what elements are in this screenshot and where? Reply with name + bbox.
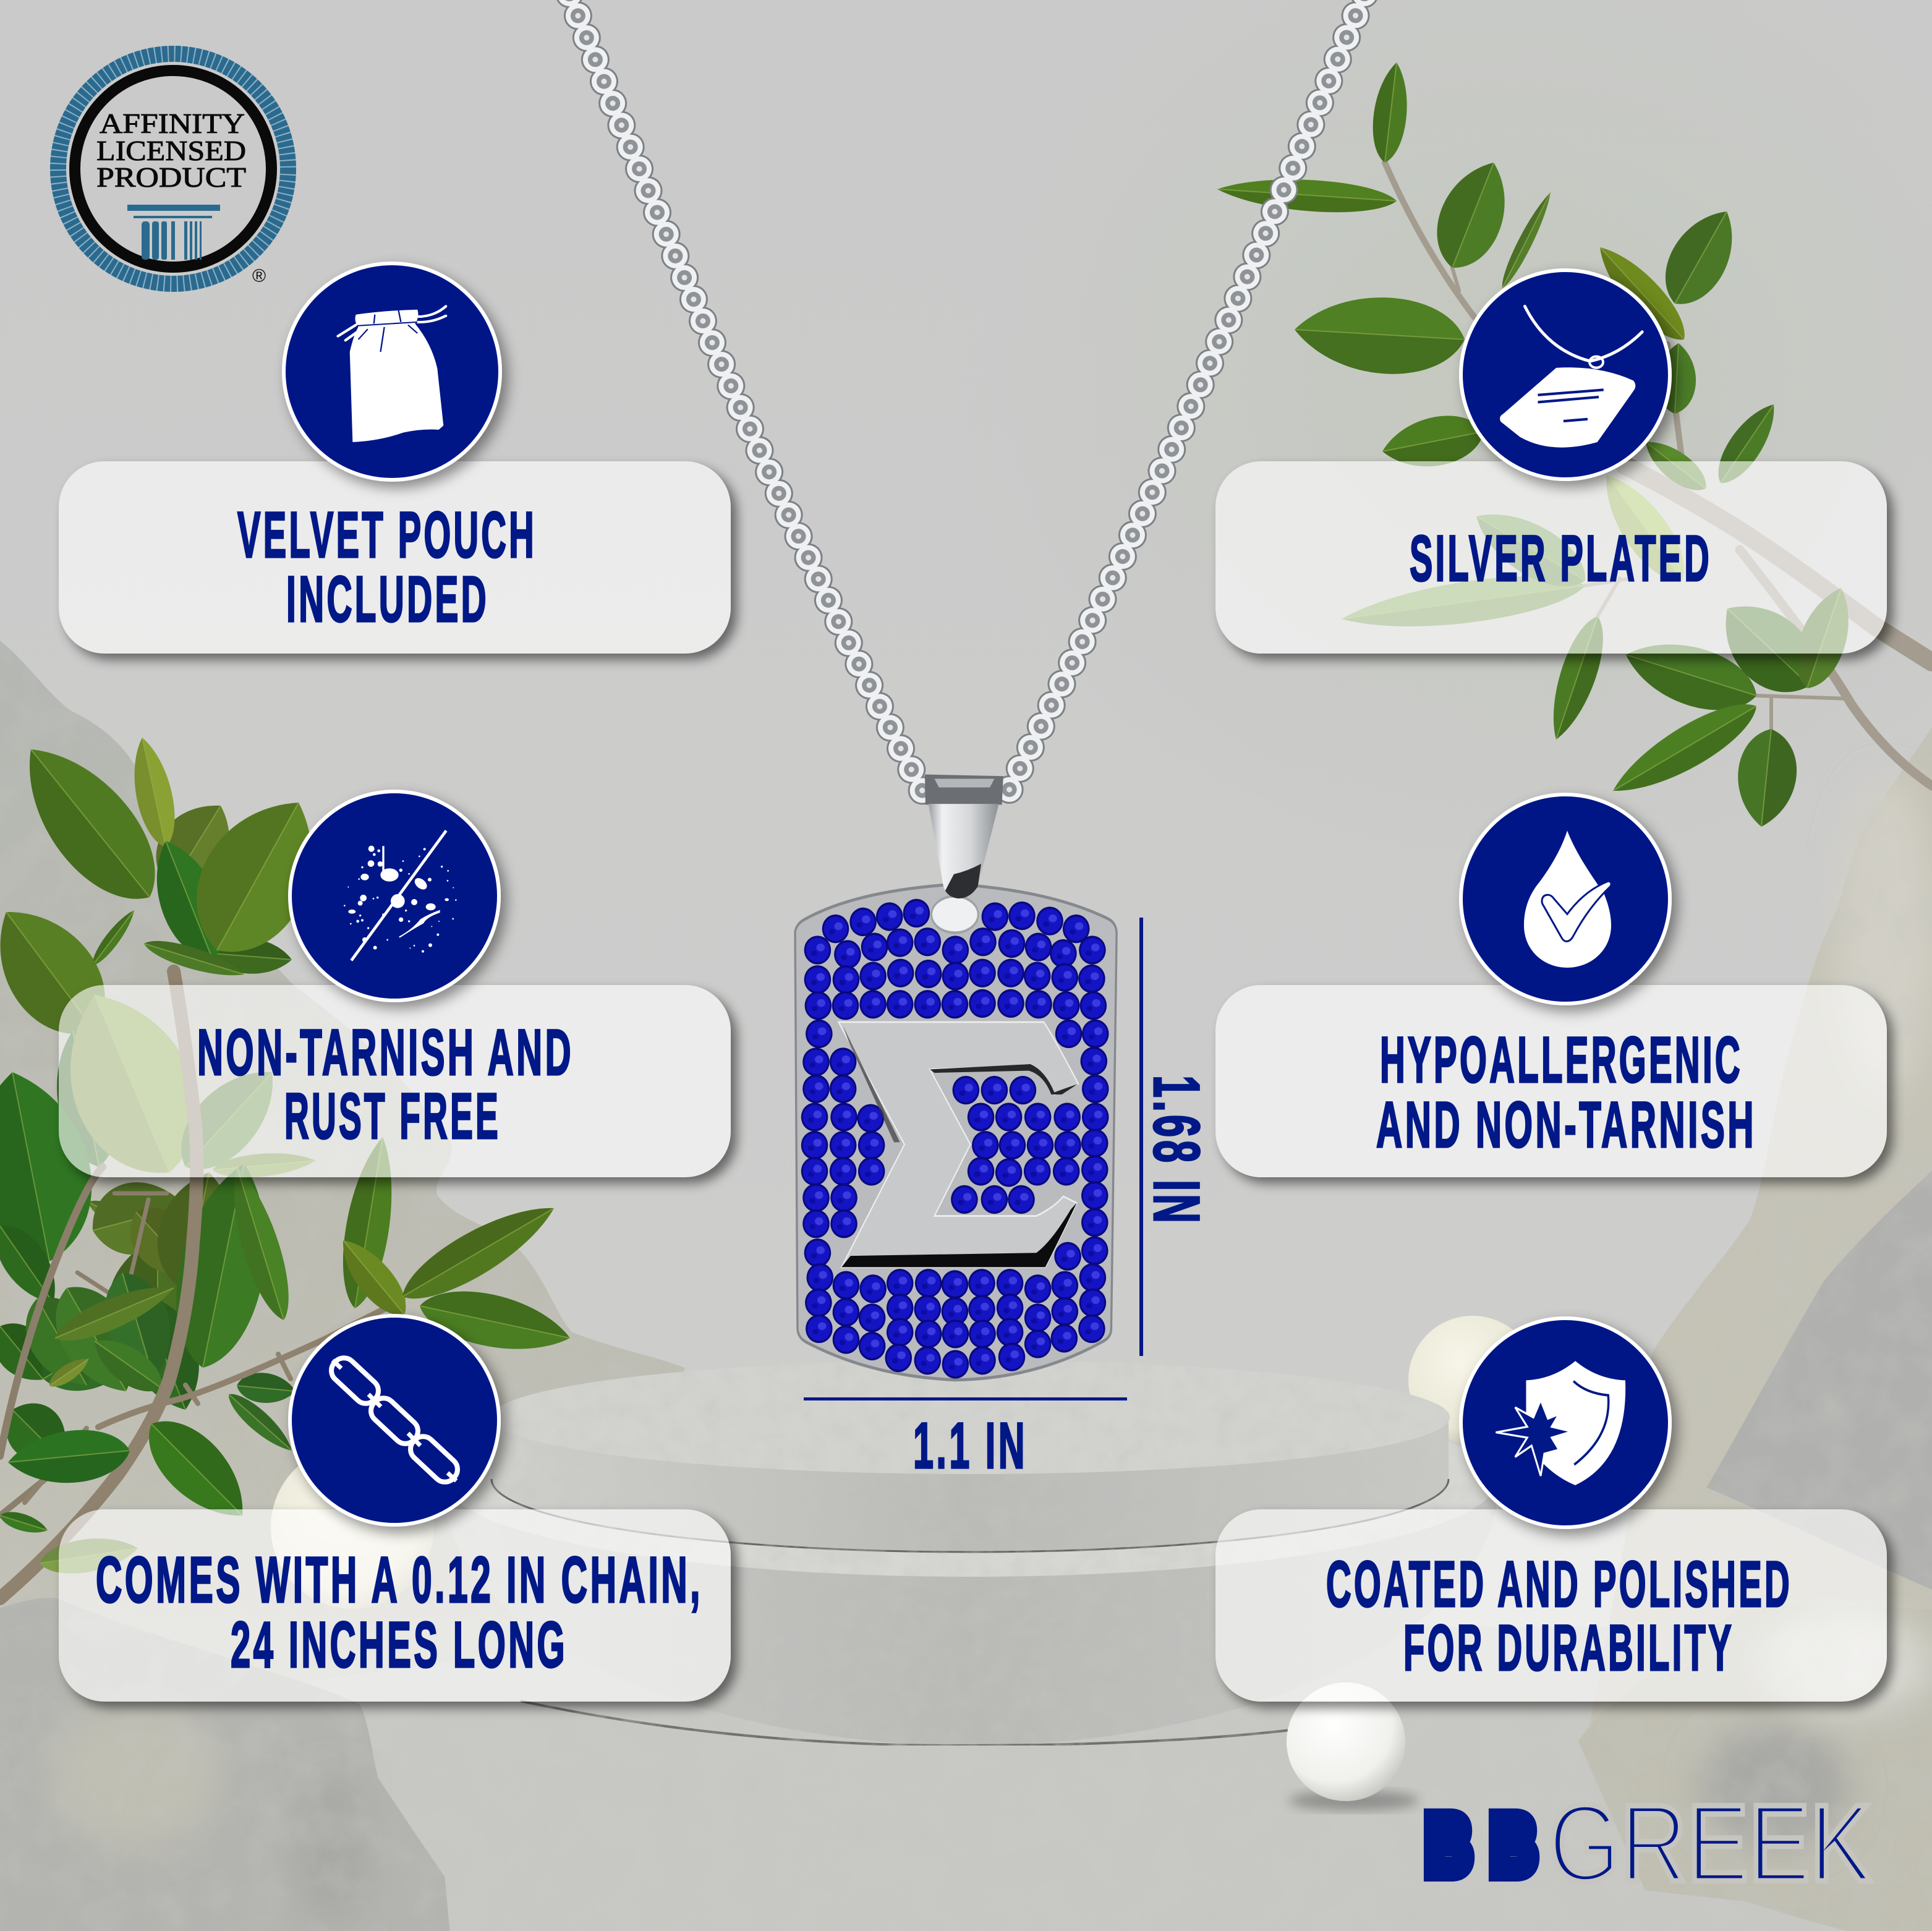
text: comes with a chain: 24 INCHES LONG [231, 1609, 568, 1681]
dog tag plate [795, 884, 1117, 1380]
pendant bail [925, 774, 1003, 898]
pendant ring [932, 897, 978, 932]
sphere: cream back left [271, 1446, 434, 1609]
badge: affinity licensed product [58, 54, 288, 286]
text: velvet pouch included: VELVET POUCH [237, 499, 537, 571]
rocks: foreground [0, 1598, 1932, 1931]
badge column [127, 205, 220, 260]
panel: velvet pouch [59, 263, 737, 660]
panel: chain length [59, 1316, 737, 1708]
panel: coated and polished [1215, 1318, 1893, 1708]
plant: upper right branch [1216, 61, 1932, 830]
text: coated and polished for durability [1326, 1548, 1792, 1684]
icon: silver tag necklace [1461, 270, 1670, 479]
badge text [96, 108, 246, 193]
text: hypoallergenic and non-tarnish [1376, 1024, 1756, 1161]
text: non-tarnish and rust free [197, 1017, 574, 1153]
dimension: width line [804, 1397, 1127, 1400]
logo: BB Greek: B [1491, 1799, 1536, 1891]
panel: silver plated [1215, 270, 1893, 660]
sigma letter [838, 1022, 1078, 1267]
badge text: LICENSED [96, 135, 246, 166]
dimension: height label: 1.68 IN [1140, 1075, 1212, 1226]
dimension: width label: 1.1 IN [913, 1410, 1028, 1482]
text: non-tarnish and rust free: NON-TARNISH AND [197, 1017, 574, 1089]
text: non-tarnish and rust free: RUST FREE [284, 1080, 501, 1153]
icon: shield with spark [1461, 1318, 1670, 1527]
icon: water drop with check [1461, 795, 1670, 1004]
pendant: dog tag with sigma [795, 774, 1117, 1380]
text: velvet pouch included [237, 499, 537, 636]
plant: lower left tree [0, 725, 576, 1598]
registered mark: ® [252, 266, 266, 286]
text: comes with a chain: COMES WITH A 0.12 IN CHAIN, [96, 1544, 703, 1616]
logo: BB Greek [1426, 1782, 1871, 1904]
icon: chain links [290, 1316, 499, 1525]
sphere: white foreground [1287, 1682, 1419, 1810]
rhinestones [801, 899, 1109, 1379]
panel: non-tarnish and rust free [59, 791, 737, 1183]
chain necklace [569, 0, 1364, 795]
text: comes with a chain [96, 1544, 703, 1681]
badge text: PRODUCT [96, 161, 246, 193]
pedestal [445, 1360, 1496, 1746]
sphere: cream back right [1408, 1316, 1537, 1444]
dimension: height line [1139, 918, 1143, 1356]
logo: BB Greek: GREEK [1549, 1782, 1871, 1904]
logo: BB Greek: B [1426, 1799, 1471, 1891]
badge text: AFFINITY [100, 108, 245, 139]
text: velvet pouch included: INCLUDED [286, 563, 489, 636]
icon: velvet pouch [284, 263, 500, 480]
icon: rust splatter [290, 791, 499, 1000]
panel: hypoallergenic [1215, 795, 1893, 1183]
